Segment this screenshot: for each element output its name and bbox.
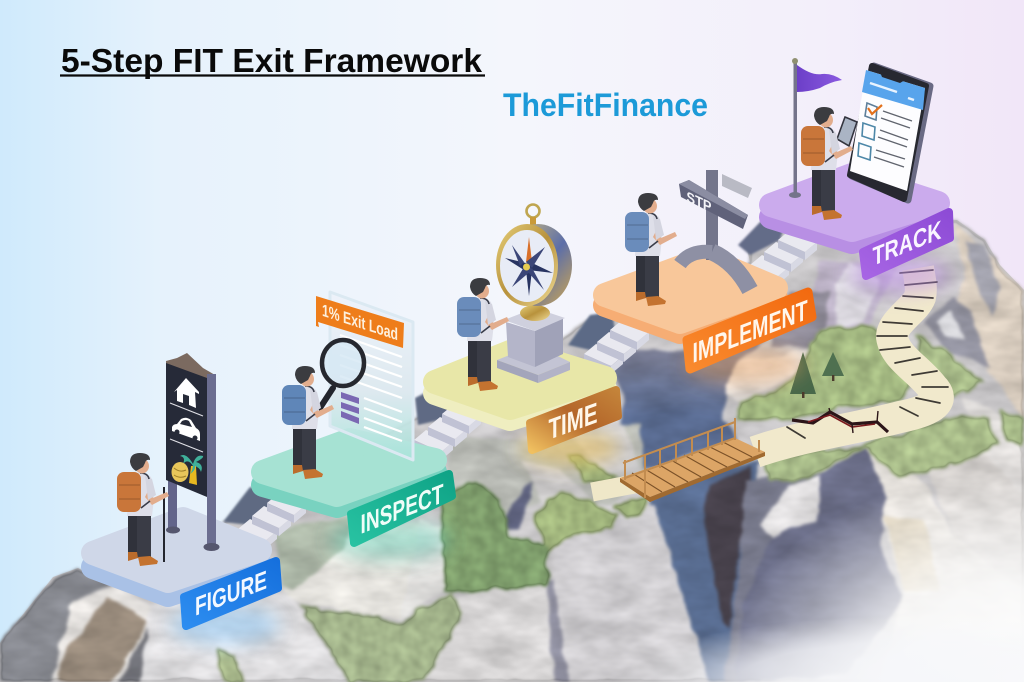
signpost with arch [679, 170, 752, 290]
hiker 4 [625, 193, 677, 306]
rock behind stairs [223, 217, 785, 525]
middle gray rock [283, 523, 450, 620]
hazy band under inspect and time [447, 425, 645, 520]
panel: step 2 inspect platform [263, 292, 435, 506]
brand name: TheFitFinance [503, 87, 708, 123]
document lines [340, 335, 402, 441]
compass needles [526, 237, 532, 262]
icon: magnifying glass [318, 340, 364, 411]
bridge rails [623, 418, 759, 498]
tag: 1% Exit Load: 1% Exit Load [322, 300, 398, 344]
lower boulders [395, 580, 553, 682]
crack in path [792, 412, 888, 432]
fog over lower right [720, 470, 1024, 682]
label: INSPECT: INSPECT [360, 478, 444, 540]
icon: car [172, 418, 200, 441]
stairs inspect to time [414, 404, 481, 460]
label: TIME: TIME [548, 397, 598, 447]
purple rows [341, 392, 359, 424]
snow peak [50, 585, 153, 682]
icon: palm and coin [172, 455, 203, 485]
icon: flag [789, 58, 842, 198]
left dark mountain [0, 568, 110, 682]
label: FIGURE [184, 561, 278, 626]
pedestal [497, 308, 570, 383]
panel: step 3 time platform [435, 204, 605, 419]
upper right faces [950, 222, 1024, 420]
label: IMPLEMENT: IMPLEMENT [692, 295, 808, 370]
arm label STP: STP [686, 189, 712, 216]
label: FIGURE: FIGURE [195, 565, 267, 622]
icon: smartphone checklist [850, 66, 930, 200]
panel: step 1 figure platform [93, 353, 260, 595]
label: TRACK [863, 212, 950, 276]
label glows [170, 257, 950, 645]
label: INSPECT [351, 474, 452, 543]
rock under implement [723, 350, 813, 403]
checklist rows [865, 103, 877, 120]
dark central cliff [605, 335, 770, 470]
hiker 2 [282, 366, 334, 479]
label: IMPLEMENT [687, 292, 812, 370]
pine trees [790, 352, 844, 398]
document panel [330, 292, 413, 460]
hiker 3 [457, 278, 509, 391]
panel: step 4 implement platform [605, 170, 776, 332]
panel: step 5 track platform [771, 58, 938, 242]
hiker 5 [801, 107, 853, 220]
left small rock [400, 520, 447, 622]
icon: trekking pole [163, 487, 165, 562]
icon: house [174, 378, 199, 408]
stairs time to implement [584, 320, 649, 374]
label: TRACK: TRACK [872, 215, 942, 272]
hiker 1 [117, 453, 169, 566]
icon: compass [496, 204, 572, 321]
path plank marks [787, 270, 948, 438]
green vegetation [217, 325, 1024, 682]
under track label [810, 260, 900, 345]
stairs implement to track [750, 230, 817, 285]
stairs figure to inspect [238, 493, 306, 549]
rope bridge [620, 418, 765, 502]
title: 5-Step FIT Exit Framework [61, 42, 483, 79]
right snow slope [140, 590, 350, 682]
icon: tablet [837, 117, 857, 146]
tag: 1% Exit Load [316, 296, 404, 348]
signboard [166, 353, 220, 551]
winding path [592, 268, 948, 492]
mountain range [0, 215, 1024, 682]
